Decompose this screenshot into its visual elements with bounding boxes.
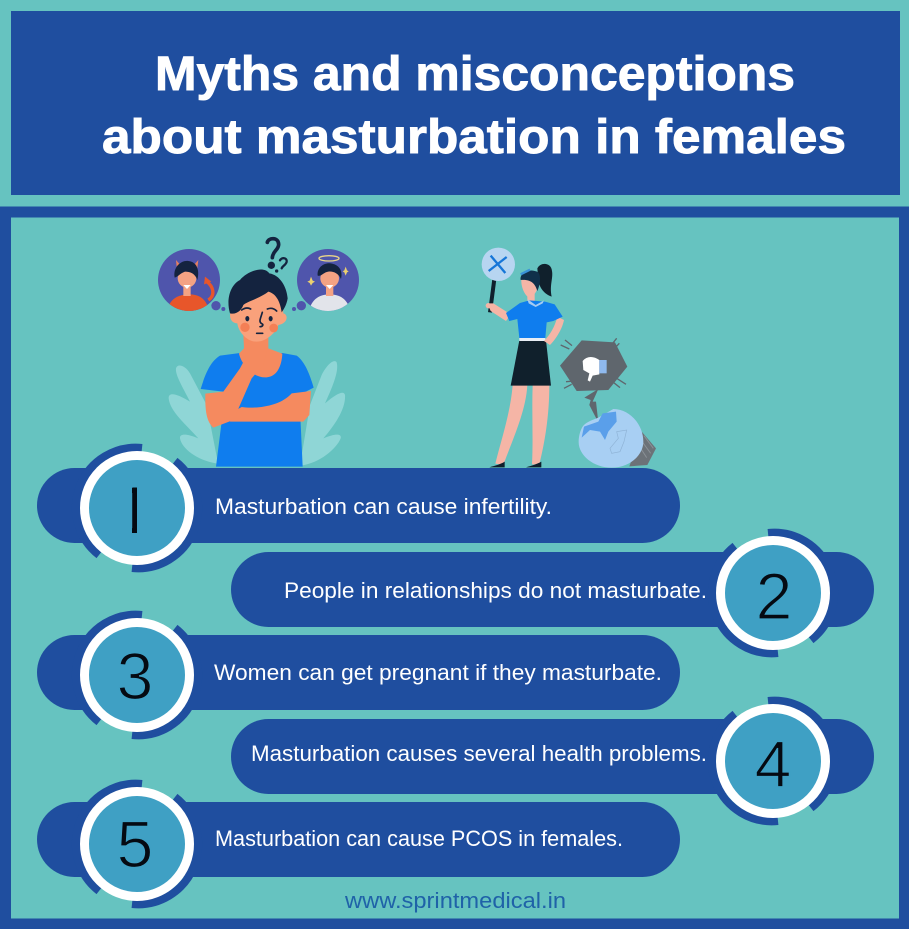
- bar: [37, 468, 680, 543]
- broken light bulb: [579, 409, 656, 468]
- face details: [242, 308, 277, 333]
- question marks: [267, 239, 287, 268]
- illustration: woman holding cross sign, thumbs-down bubble and broken bulb: [482, 248, 656, 468]
- neck and chest: [239, 335, 282, 377]
- thumbs-down speech bubble: [560, 338, 627, 422]
- sign with cross: [482, 248, 515, 312]
- number: 3: [117, 639, 153, 713]
- text: Masturbation can cause PCOS in females.: [215, 826, 623, 851]
- bar: [231, 552, 874, 627]
- folded arms: [230, 391, 311, 422]
- number badge: [712, 533, 834, 653]
- blouse: [506, 300, 563, 338]
- myth 1: [37, 448, 680, 568]
- bar: [231, 719, 874, 794]
- number: 2: [756, 559, 792, 633]
- arms: [487, 303, 564, 345]
- illustration: thinking man with devil and angel thought bubbles: [158, 239, 359, 467]
- skirt: [511, 340, 551, 386]
- text: Masturbation can cause infertility.: [215, 494, 552, 519]
- title: Myths and misconceptions: [155, 48, 795, 101]
- hair: [228, 270, 288, 314]
- head: [230, 290, 287, 342]
- thumbs-down icon: [583, 357, 599, 382]
- leaves behind man: [169, 361, 345, 466]
- number badge: [76, 784, 198, 904]
- myth 2: [231, 533, 874, 653]
- myth 3: [37, 615, 680, 735]
- text: Women can get pregnant if they masturbate.: [214, 660, 662, 685]
- shirt: [201, 353, 314, 467]
- number badge: [712, 701, 834, 821]
- header panel: [11, 11, 900, 195]
- text: People in relationships do not masturbate.: [284, 578, 707, 603]
- myth 5: [37, 784, 680, 904]
- devil thought bubble: [158, 249, 225, 312]
- website footer: www.sprintmedical.in: [344, 888, 566, 913]
- neck: [527, 293, 535, 303]
- number: 4: [755, 727, 791, 801]
- number badge: [76, 448, 198, 568]
- head and ponytail: [537, 264, 552, 297]
- title: [102, 48, 846, 164]
- woman legs: [495, 385, 549, 465]
- text: Masturbation causes several health problems.: [251, 741, 707, 766]
- bar: [37, 802, 680, 877]
- title: about masturbation in females: [102, 111, 846, 164]
- shoes: [489, 462, 541, 467]
- angel thought bubble: [292, 249, 359, 312]
- bar: [37, 635, 680, 710]
- number badge: [76, 615, 198, 735]
- number: 5: [117, 807, 153, 881]
- number: 1: [116, 473, 152, 547]
- myth 4: [231, 701, 874, 821]
- main content panel: [6, 212, 904, 924]
